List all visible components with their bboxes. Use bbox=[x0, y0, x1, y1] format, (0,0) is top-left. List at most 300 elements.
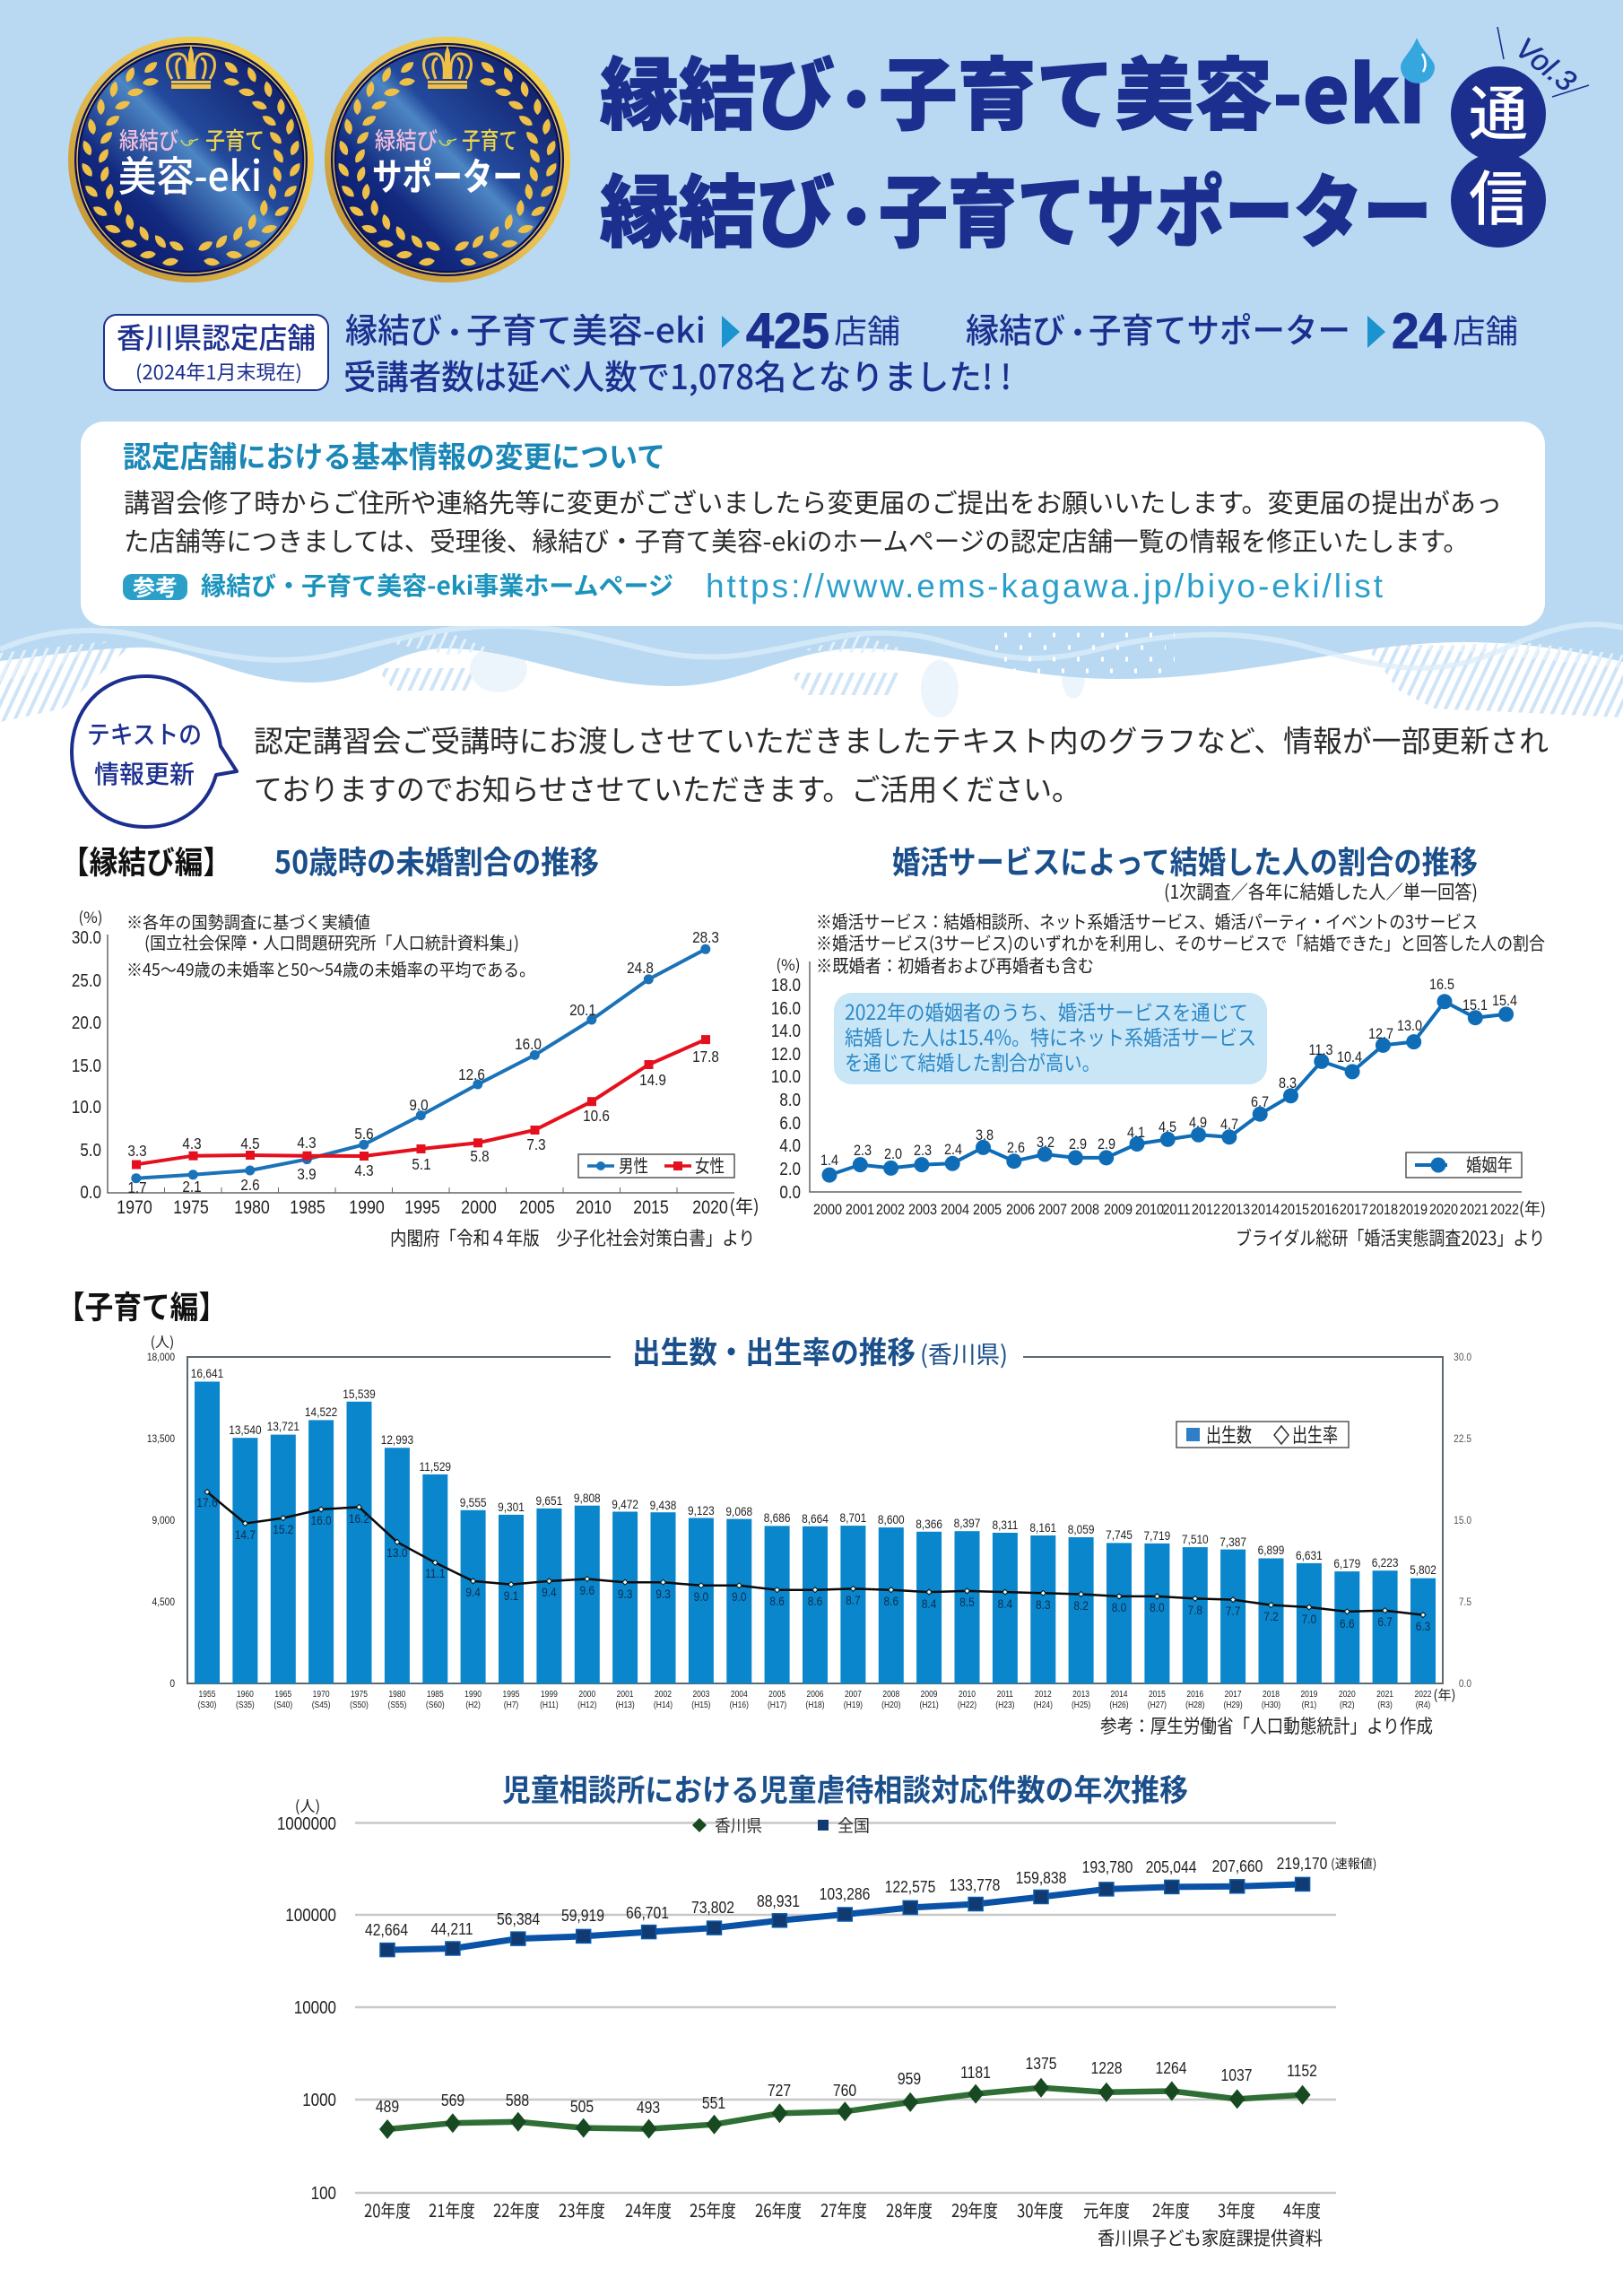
chart heading: 未婚割合: 50歳時の未婚割合の推移 bbox=[274, 838, 599, 883]
heading: 縁結び編: 【縁結び編】 bbox=[61, 838, 231, 883]
year labels: 2018 bbox=[1263, 1689, 1280, 1699]
value labels: 4.9 bbox=[1189, 1115, 1207, 1131]
year labels: (R1) bbox=[1302, 1700, 1316, 1709]
line chart: 婚活サービス: 12.0 bbox=[771, 1044, 801, 1064]
birth rate labels: 8.6 bbox=[769, 1594, 785, 1608]
title: ・ bbox=[825, 169, 888, 259]
axis labels: 0.0 bbox=[1459, 1678, 1471, 1690]
badge: 通信 vol.3: Vol.3 bbox=[1510, 30, 1583, 98]
year labels: 1990 bbox=[464, 1689, 482, 1699]
value labels: 香川県: 1152 bbox=[1287, 2061, 1317, 2080]
shop counts: ・ bbox=[441, 311, 468, 351]
legend bbox=[1176, 1420, 1349, 1448]
axis labels: 7.5 bbox=[1459, 1596, 1471, 1608]
line chart: 未婚割合 bbox=[72, 905, 759, 1218]
value labels: 全国: 44,211 bbox=[431, 1919, 473, 1938]
birth rate labels: 6.6 bbox=[1340, 1616, 1355, 1631]
value labels: 5.8 bbox=[470, 1147, 490, 1165]
year labels: (H27) bbox=[1148, 1700, 1167, 1709]
notes: ※各年の国勢調査に基づく実績値 bbox=[126, 909, 370, 934]
year labels: 2000 bbox=[578, 1689, 595, 1699]
notes bbox=[126, 909, 535, 981]
line chart: 未婚割合: 2015 bbox=[633, 1197, 669, 1218]
value labels: 全国: 88,931 bbox=[757, 1892, 800, 1910]
line chart: 婚活サービス: 2016 bbox=[1310, 1202, 1339, 1218]
birth rate labels: 9.0 bbox=[732, 1589, 747, 1604]
axis labels bbox=[147, 1352, 1471, 1690]
year labels: (H14) bbox=[654, 1700, 673, 1709]
axis labels: 22.5 bbox=[1454, 1433, 1471, 1445]
fiscal year labels: 24年度 bbox=[625, 2196, 672, 2222]
value labels: 2.0 bbox=[884, 1146, 902, 1162]
reference link bbox=[123, 567, 1384, 604]
value labels: 15.4 bbox=[1492, 993, 1517, 1009]
value labels: 8.3 bbox=[1279, 1075, 1297, 1091]
year labels: 2019 bbox=[1300, 1689, 1317, 1699]
year labels: (H28) bbox=[1185, 1700, 1204, 1709]
value labels: 9.0 bbox=[409, 1096, 429, 1114]
birth rate labels: 7.7 bbox=[1226, 1604, 1240, 1618]
value labels: 4.3 bbox=[297, 1134, 317, 1152]
year labels: 1980 bbox=[388, 1689, 405, 1699]
axis labels: 9,000 bbox=[152, 1515, 175, 1526]
birth rate labels: 8.0 bbox=[1150, 1600, 1165, 1614]
birth rate labels: 11.1 bbox=[425, 1566, 445, 1580]
source: 人口動態統計: 参考：厚生労働省「人口動態統計」より作成 bbox=[1100, 1712, 1433, 1739]
bar value labels: 11,529 bbox=[420, 1459, 451, 1474]
year labels: 2013 bbox=[1072, 1689, 1089, 1699]
source: ブライダル総研: ブライダル総研「婚活実態調査2023」より bbox=[1236, 1224, 1545, 1251]
shop counts: 縁結び bbox=[966, 303, 1065, 352]
fiscal year labels: 23年度 bbox=[559, 2196, 605, 2222]
line chart: 未婚割合: 1980 bbox=[234, 1197, 270, 1218]
year labels: 2020 bbox=[1339, 1689, 1356, 1699]
line chart: 婚活サービス: (%) bbox=[776, 952, 801, 975]
year labels: 2010 bbox=[959, 1689, 976, 1699]
callout bubble: テキストの情報更新 bbox=[72, 676, 237, 827]
line chart: 婚活サービス: 14.0 bbox=[771, 1021, 801, 1040]
line chart: 婚活サービス: 2019 bbox=[1399, 1202, 1428, 1218]
chart heading: 児童虐待: 児童相談所における児童虐待相談対応件数の年次推移 bbox=[502, 1766, 1188, 1810]
line chart: 婚活サービス: 2013 bbox=[1221, 1202, 1250, 1218]
line chart: 未婚割合: 2010 bbox=[576, 1197, 612, 1218]
value labels: 3.8 bbox=[976, 1127, 994, 1144]
badge: サポーター: サポーター bbox=[372, 147, 523, 202]
line chart: 婚活サービス: 16.0 bbox=[771, 998, 801, 1018]
year labels: (H24) bbox=[1034, 1700, 1053, 1709]
panel body text: た店舗等につきましては、受理後、縁結び・子育て美容-ekiのホームページの認定店舗一覧の情報を修正いたします。 bbox=[124, 521, 1469, 559]
year labels: (H26) bbox=[1109, 1700, 1129, 1709]
value labels bbox=[820, 977, 1517, 1169]
axis labels: 15.0 bbox=[1454, 1515, 1471, 1526]
year labels: (H25) bbox=[1072, 1700, 1090, 1709]
value labels: 14.9 bbox=[639, 1071, 666, 1089]
birth rate labels: 9.0 bbox=[694, 1589, 708, 1604]
fiscal year labels: 29年度 bbox=[951, 2196, 998, 2222]
intro text: 認定講習会ご受講時にお渡しさせていただきましたテキスト内のグラフなど、情報が一部更新され bbox=[254, 718, 1549, 761]
value labels: 20.1 bbox=[569, 1001, 596, 1019]
birth rate labels: 9.4 bbox=[542, 1585, 557, 1599]
year labels: 2001 bbox=[617, 1689, 634, 1699]
year labels: (H22) bbox=[958, 1700, 976, 1709]
line chart: 婚活サービス: 2015 bbox=[1280, 1202, 1309, 1218]
year labels: (S50) bbox=[350, 1700, 369, 1709]
shop counts: 425 bbox=[746, 302, 829, 359]
value labels: 香川県: 1181 bbox=[960, 2063, 991, 2082]
series: 女性 bbox=[132, 1035, 710, 1170]
value labels: 香川県: 959 bbox=[898, 2069, 921, 2088]
axis labels: 30.0 bbox=[1454, 1352, 1471, 1363]
value labels: 10.6 bbox=[583, 1107, 610, 1125]
value labels: 4.3 bbox=[182, 1135, 202, 1152]
value labels: 2.6 bbox=[1007, 1140, 1025, 1156]
value labels: 1.7 bbox=[127, 1178, 147, 1196]
year labels: (H29) bbox=[1223, 1700, 1243, 1709]
line chart: 婚活サービス: 2022 bbox=[1490, 1202, 1519, 1218]
legend bbox=[1406, 1151, 1522, 1178]
series: 婚姻年 bbox=[821, 994, 1514, 1183]
chart notes: ※既婚者：初婚者および再婚者も含む bbox=[816, 952, 1094, 978]
legend: 全国 bbox=[838, 1813, 870, 1837]
year labels: 1985 bbox=[427, 1689, 444, 1699]
fiscal year labels: 22年度 bbox=[493, 2196, 540, 2222]
fiscal year labels: 20年度 bbox=[364, 2196, 411, 2222]
line chart: 婚活サービス: 2008 bbox=[1071, 1202, 1099, 1218]
birth rate labels: 9.3 bbox=[655, 1587, 671, 1601]
year labels: 2017 bbox=[1225, 1689, 1242, 1699]
line chart: 児童虐待相談: (速報値) bbox=[1331, 1855, 1376, 1873]
line chart: 未婚割合: 1990 bbox=[349, 1197, 385, 1218]
birth rate labels: 13.0 bbox=[386, 1545, 407, 1560]
value labels: 5.6 bbox=[354, 1125, 374, 1143]
line chart: 婚活サービス: 2009 bbox=[1104, 1202, 1133, 1218]
year labels: (H11) bbox=[540, 1700, 559, 1709]
bar value labels: 8,664 bbox=[802, 1511, 829, 1526]
line chart: 未婚割合: 2020 bbox=[692, 1197, 728, 1218]
shop counts: 子育てサポーター bbox=[1089, 303, 1350, 352]
bar value labels: 6,899 bbox=[1258, 1543, 1284, 1557]
year labels: (S55) bbox=[388, 1700, 406, 1709]
fiscal year labels: 28年度 bbox=[886, 2196, 933, 2222]
year labels: 2014 bbox=[1111, 1689, 1127, 1699]
year labels: 2022 bbox=[1415, 1689, 1431, 1699]
badge: 美容-eki: 子育て bbox=[205, 123, 265, 156]
year labels: (R2) bbox=[1340, 1700, 1355, 1709]
value labels: 全国: 133,778 bbox=[950, 1875, 1000, 1894]
birth rate labels: 16.0 bbox=[311, 1513, 332, 1527]
line chart: 婚活サービス: 2006 bbox=[1006, 1202, 1035, 1218]
value labels: 2.1 bbox=[182, 1178, 202, 1196]
bar chart: 出生数・出生率 bbox=[147, 1330, 1471, 1709]
reference link: 参考 bbox=[133, 570, 178, 603]
bar value labels: 9,123 bbox=[688, 1503, 715, 1518]
value labels: 全国: 207,660 bbox=[1212, 1857, 1263, 1875]
line chart: 婚活サービス: 8.0 bbox=[779, 1090, 801, 1109]
value labels: 香川県 bbox=[376, 2054, 1317, 2117]
birth rate labels: 8.7 bbox=[846, 1593, 861, 1607]
series: 男性 bbox=[131, 944, 710, 1183]
bar value labels: 7,719 bbox=[1144, 1528, 1170, 1543]
line chart: 婚活サービス: 2005 bbox=[973, 1202, 1002, 1218]
line chart: 婚活サービス: 18.0 bbox=[771, 975, 801, 995]
year labels: (S45) bbox=[312, 1700, 330, 1709]
bar value labels: 7,510 bbox=[1182, 1532, 1209, 1546]
line chart: 未婚割合: 25.0 bbox=[72, 970, 101, 990]
bar value labels: 9,068 bbox=[725, 1504, 752, 1518]
line chart: 児童虐待相談: 1000000 bbox=[277, 1813, 336, 1833]
intro text bbox=[254, 718, 1549, 809]
line chart: 未婚割合: 2000 bbox=[461, 1197, 497, 1218]
badge: 美容-eki bbox=[68, 37, 314, 283]
birth rate labels: 9.6 bbox=[580, 1583, 595, 1597]
birth rate labels: 17.6 bbox=[196, 1495, 218, 1509]
value labels: 24.8 bbox=[627, 959, 654, 977]
bar value labels: 9,808 bbox=[574, 1491, 601, 1505]
year labels: (S40) bbox=[273, 1700, 292, 1709]
line chart: 婚活サービス: 2020 bbox=[1429, 1202, 1458, 1218]
birth rate labels: 6.3 bbox=[1416, 1619, 1430, 1633]
year labels: 2004 bbox=[731, 1689, 748, 1699]
year labels: 1960 bbox=[237, 1689, 254, 1699]
value labels: 香川県: 1037 bbox=[1221, 2066, 1252, 2084]
year labels: 2011 bbox=[997, 1689, 1013, 1699]
intro text: ておりますのでお知らせさせていただきます。ご活用ください。 bbox=[254, 766, 1081, 809]
shop counts: 店舗 bbox=[1453, 306, 1518, 352]
year labels: (H20) bbox=[881, 1700, 900, 1709]
year labels: 2006 bbox=[807, 1689, 823, 1699]
year labels: 1975 bbox=[351, 1689, 368, 1699]
notes: ※45～49歳の未婚率と50～54歳の未婚率の平均である。 bbox=[126, 957, 535, 981]
legend: 出生数 bbox=[1206, 1420, 1252, 1448]
line chart: 婚活サービス: 2004 bbox=[941, 1202, 969, 1218]
badge: 通信 vol.3 bbox=[1451, 27, 1589, 248]
year labels: (H7) bbox=[504, 1700, 518, 1709]
value labels: 全国: 59,919 bbox=[561, 1906, 604, 1925]
panel heading: 認定店舗における基本情報の変更について bbox=[123, 433, 665, 476]
year labels: 1965 bbox=[274, 1689, 291, 1699]
value labels bbox=[127, 928, 719, 1196]
callout bubble: テキストの情報更新: 情報更新 bbox=[94, 755, 195, 791]
line chart: 未婚割合: (%) bbox=[78, 905, 103, 927]
legend: 香川県 bbox=[715, 1813, 762, 1837]
birth rate labels: 8.3 bbox=[1036, 1597, 1051, 1612]
value labels: 2.3 bbox=[854, 1143, 872, 1159]
chart heading: 出生数: (香川県) bbox=[920, 1335, 1008, 1370]
birth rate labels: 9.3 bbox=[618, 1587, 632, 1601]
year labels: (H18) bbox=[805, 1700, 825, 1709]
value labels: 全国 bbox=[365, 1854, 1327, 1939]
year labels: 2003 bbox=[692, 1689, 709, 1699]
year labels: (H21) bbox=[919, 1700, 939, 1709]
value labels: 7.3 bbox=[526, 1135, 546, 1153]
line chart: 未婚割合: 5.0 bbox=[80, 1140, 101, 1160]
legend: 婚姻年 bbox=[1466, 1151, 1513, 1177]
year labels bbox=[198, 1689, 1431, 1709]
birth rate labels: 8.4 bbox=[922, 1596, 936, 1611]
line chart: 児童虐待相談 bbox=[277, 1794, 1376, 2222]
bar value labels: 5,802 bbox=[1410, 1562, 1436, 1577]
shop counts: 子育て美容-eki bbox=[466, 303, 706, 352]
year labels: 1955 bbox=[199, 1689, 215, 1699]
shop counts bbox=[343, 302, 1518, 399]
line chart: 児童虐待相談: 100 bbox=[311, 2183, 336, 2203]
bar value labels: 8,311 bbox=[992, 1518, 1018, 1532]
value labels: 香川県: 760 bbox=[833, 2081, 856, 2100]
year labels: 2008 bbox=[882, 1689, 899, 1699]
line chart: 婚活サービス: 2021 bbox=[1460, 1202, 1488, 1218]
heading: 子育て編: 【子育て編】 bbox=[56, 1283, 227, 1328]
year labels: 2007 bbox=[845, 1689, 862, 1699]
certified shops label: 香川県認定店舗 bbox=[117, 316, 316, 357]
value labels: 全国: 205,044 bbox=[1146, 1857, 1197, 1876]
bar value labels: 14,522 bbox=[305, 1405, 337, 1419]
callout: 2022年 bbox=[834, 993, 1267, 1084]
year labels: 2015 bbox=[1149, 1689, 1166, 1699]
value labels: 15.1 bbox=[1462, 997, 1488, 1013]
birth rate labels: 7.8 bbox=[1188, 1603, 1202, 1617]
line chart: 児童虐待相談: (人) bbox=[295, 1794, 320, 1816]
panel body text: 講習会修了時からご住所や連絡先等に変更がございましたら変更届のご提出をお願いいたします。変更届の提出があっ bbox=[124, 483, 1502, 520]
fiscal year labels: 2年度 bbox=[1152, 2196, 1190, 2222]
title bbox=[600, 32, 1432, 264]
bar value labels: 6,631 bbox=[1296, 1548, 1323, 1562]
value labels: 12.7 bbox=[1368, 1026, 1393, 1042]
bar value labels: 6,179 bbox=[1333, 1556, 1360, 1570]
chart notes bbox=[816, 908, 1545, 978]
value labels: 香川県: 489 bbox=[376, 2097, 399, 2116]
title: 縁結び bbox=[600, 32, 835, 146]
axis labels: 18,000 bbox=[147, 1352, 175, 1363]
birth rate labels: 8.5 bbox=[959, 1595, 975, 1609]
year labels: 1999 bbox=[541, 1689, 558, 1699]
value labels: 香川県: 493 bbox=[637, 2098, 660, 2117]
bar value labels: 9,438 bbox=[650, 1498, 676, 1512]
bar value labels: 16,641 bbox=[191, 1366, 223, 1380]
year labels: 2009 bbox=[921, 1689, 938, 1699]
fiscal year labels: 元年度 bbox=[1083, 2196, 1130, 2222]
line chart: 婚活サービス: 2002 bbox=[876, 1202, 905, 1218]
value labels: 香川県: 505 bbox=[570, 2097, 594, 2116]
bar value labels bbox=[191, 1366, 1436, 1577]
chart subtitle: (1次調査／各年に結婚した人／単一回答) bbox=[1164, 878, 1478, 905]
line chart: 婚活サービス: 6.0 bbox=[779, 1113, 801, 1133]
panel body text bbox=[124, 483, 1502, 559]
reference link: https://www.ems-kagawa.jp/biyo-eki/list bbox=[706, 568, 1384, 604]
line chart: 婚活サービス: 2012 bbox=[1192, 1202, 1220, 1218]
notes: (国立社会保障・人口問題研究所「人口統計資料集」) bbox=[144, 930, 519, 954]
birth rate labels bbox=[196, 1495, 1430, 1633]
line chart: 児童虐待相談: 1000 bbox=[302, 2090, 336, 2109]
bar value labels: 8,366 bbox=[916, 1517, 942, 1531]
value labels: 2.4 bbox=[944, 1142, 962, 1158]
year labels: (S30) bbox=[198, 1700, 216, 1709]
title: ・ bbox=[825, 51, 888, 142]
value labels: 全国: 56,384 bbox=[497, 1909, 540, 1928]
line chart: 児童虐待相談: 10000 bbox=[294, 1997, 336, 2017]
year labels: (H17) bbox=[768, 1700, 786, 1709]
value labels: 4.1 bbox=[1127, 1125, 1145, 1141]
bar value labels: 8,161 bbox=[1029, 1520, 1056, 1535]
icon: water drop bbox=[1401, 38, 1435, 83]
line chart: 婚活サービス: 2001 bbox=[846, 1202, 874, 1218]
bar value labels: 8,600 bbox=[878, 1512, 905, 1526]
value labels: 16.0 bbox=[515, 1035, 542, 1053]
bar value labels: 7,745 bbox=[1106, 1527, 1133, 1542]
birth rate labels: 6.7 bbox=[1377, 1614, 1393, 1629]
bars bbox=[195, 1381, 1436, 1683]
line chart: 未婚割合: 15.0 bbox=[72, 1056, 101, 1075]
axis labels: 0 bbox=[169, 1678, 175, 1690]
year labels: (R3) bbox=[1377, 1700, 1393, 1709]
badge: サポーター bbox=[325, 37, 570, 283]
shop counts: 縁結び bbox=[345, 303, 442, 352]
year labels: (H15) bbox=[691, 1700, 711, 1709]
value labels: 香川県: 551 bbox=[702, 2093, 725, 2112]
source: 香川県子ども家庭課: 香川県子ども家庭課提供資料 bbox=[1098, 2224, 1323, 2251]
value labels: 香川県: 1375 bbox=[1026, 2054, 1056, 2073]
axis labels: 13,500 bbox=[147, 1433, 175, 1445]
value labels: 11.3 bbox=[1309, 1042, 1333, 1058]
birth rate labels: 8.2 bbox=[1073, 1598, 1089, 1613]
year labels: (R4) bbox=[1416, 1700, 1430, 1709]
legend bbox=[578, 1152, 734, 1178]
year labels: 2005 bbox=[768, 1689, 785, 1699]
value labels: 3.9 bbox=[297, 1165, 317, 1183]
line chart: 未婚割合: 1995 bbox=[404, 1197, 440, 1218]
birth rate line bbox=[207, 1492, 1423, 1615]
birth rate labels: 8.4 bbox=[998, 1596, 1012, 1611]
badge: 通信 vol.3: 通 bbox=[1469, 66, 1528, 152]
value labels: 17.8 bbox=[692, 1048, 719, 1065]
bar value labels: 13,721 bbox=[267, 1419, 299, 1433]
year labels: (H13) bbox=[615, 1700, 635, 1709]
line chart: 婚活サービス: 0.0 bbox=[779, 1182, 801, 1202]
callout: 2022年: 2022年の婚姻者のうち、婚活サービスを通じて bbox=[845, 996, 1248, 1026]
bar value labels: 9,472 bbox=[612, 1497, 638, 1511]
bar chart: 出生数・出生率: (年) bbox=[1433, 1685, 1456, 1704]
value labels: 2.3 bbox=[914, 1143, 932, 1159]
line chart: 婚活サービス: 2000 bbox=[813, 1202, 842, 1218]
value labels: 16.5 bbox=[1429, 977, 1454, 993]
line chart: 未婚割合: 1985 bbox=[290, 1197, 325, 1218]
bar value labels: 9,555 bbox=[460, 1495, 486, 1509]
year labels: 1995 bbox=[503, 1689, 519, 1699]
fiscal year labels: 27年度 bbox=[820, 2196, 867, 2222]
line chart: 婚活サービス bbox=[771, 952, 1546, 1220]
year labels: 2021 bbox=[1376, 1689, 1393, 1699]
shop counts: ・ bbox=[1064, 311, 1091, 351]
value labels: 香川県: 569 bbox=[441, 2091, 464, 2109]
fiscal year labels: 3年度 bbox=[1218, 2196, 1255, 2222]
birth rate labels: 8.6 bbox=[884, 1594, 898, 1608]
axis labels: 4,500 bbox=[152, 1596, 175, 1608]
year labels: (S60) bbox=[426, 1700, 445, 1709]
callout: 2022年: 結婚した人は15.4%。特にネット系婚活サービス bbox=[845, 1021, 1256, 1051]
birth rate labels: 8.6 bbox=[808, 1594, 822, 1608]
value labels: 全国: 66,701 bbox=[626, 1903, 669, 1922]
source: 少子化社会対策白書: 内閣府「令和４年版 少子化社会対策白書」より bbox=[390, 1224, 755, 1251]
year labels: 1970 bbox=[313, 1689, 330, 1699]
badge: サポーター: 子育て bbox=[462, 123, 517, 156]
line chart: 児童虐待相談: 100000 bbox=[285, 1905, 336, 1925]
series: 香川県 bbox=[379, 2078, 1311, 2139]
line chart: 未婚割合: 1975 bbox=[173, 1197, 209, 1218]
year labels: 2016 bbox=[1186, 1689, 1203, 1699]
fiscal year labels bbox=[364, 2196, 1321, 2222]
value labels: 12.6 bbox=[458, 1065, 485, 1083]
line chart: 未婚割合: 0.0 bbox=[80, 1182, 101, 1202]
line chart: 婚活サービス: 2007 bbox=[1038, 1202, 1067, 1218]
